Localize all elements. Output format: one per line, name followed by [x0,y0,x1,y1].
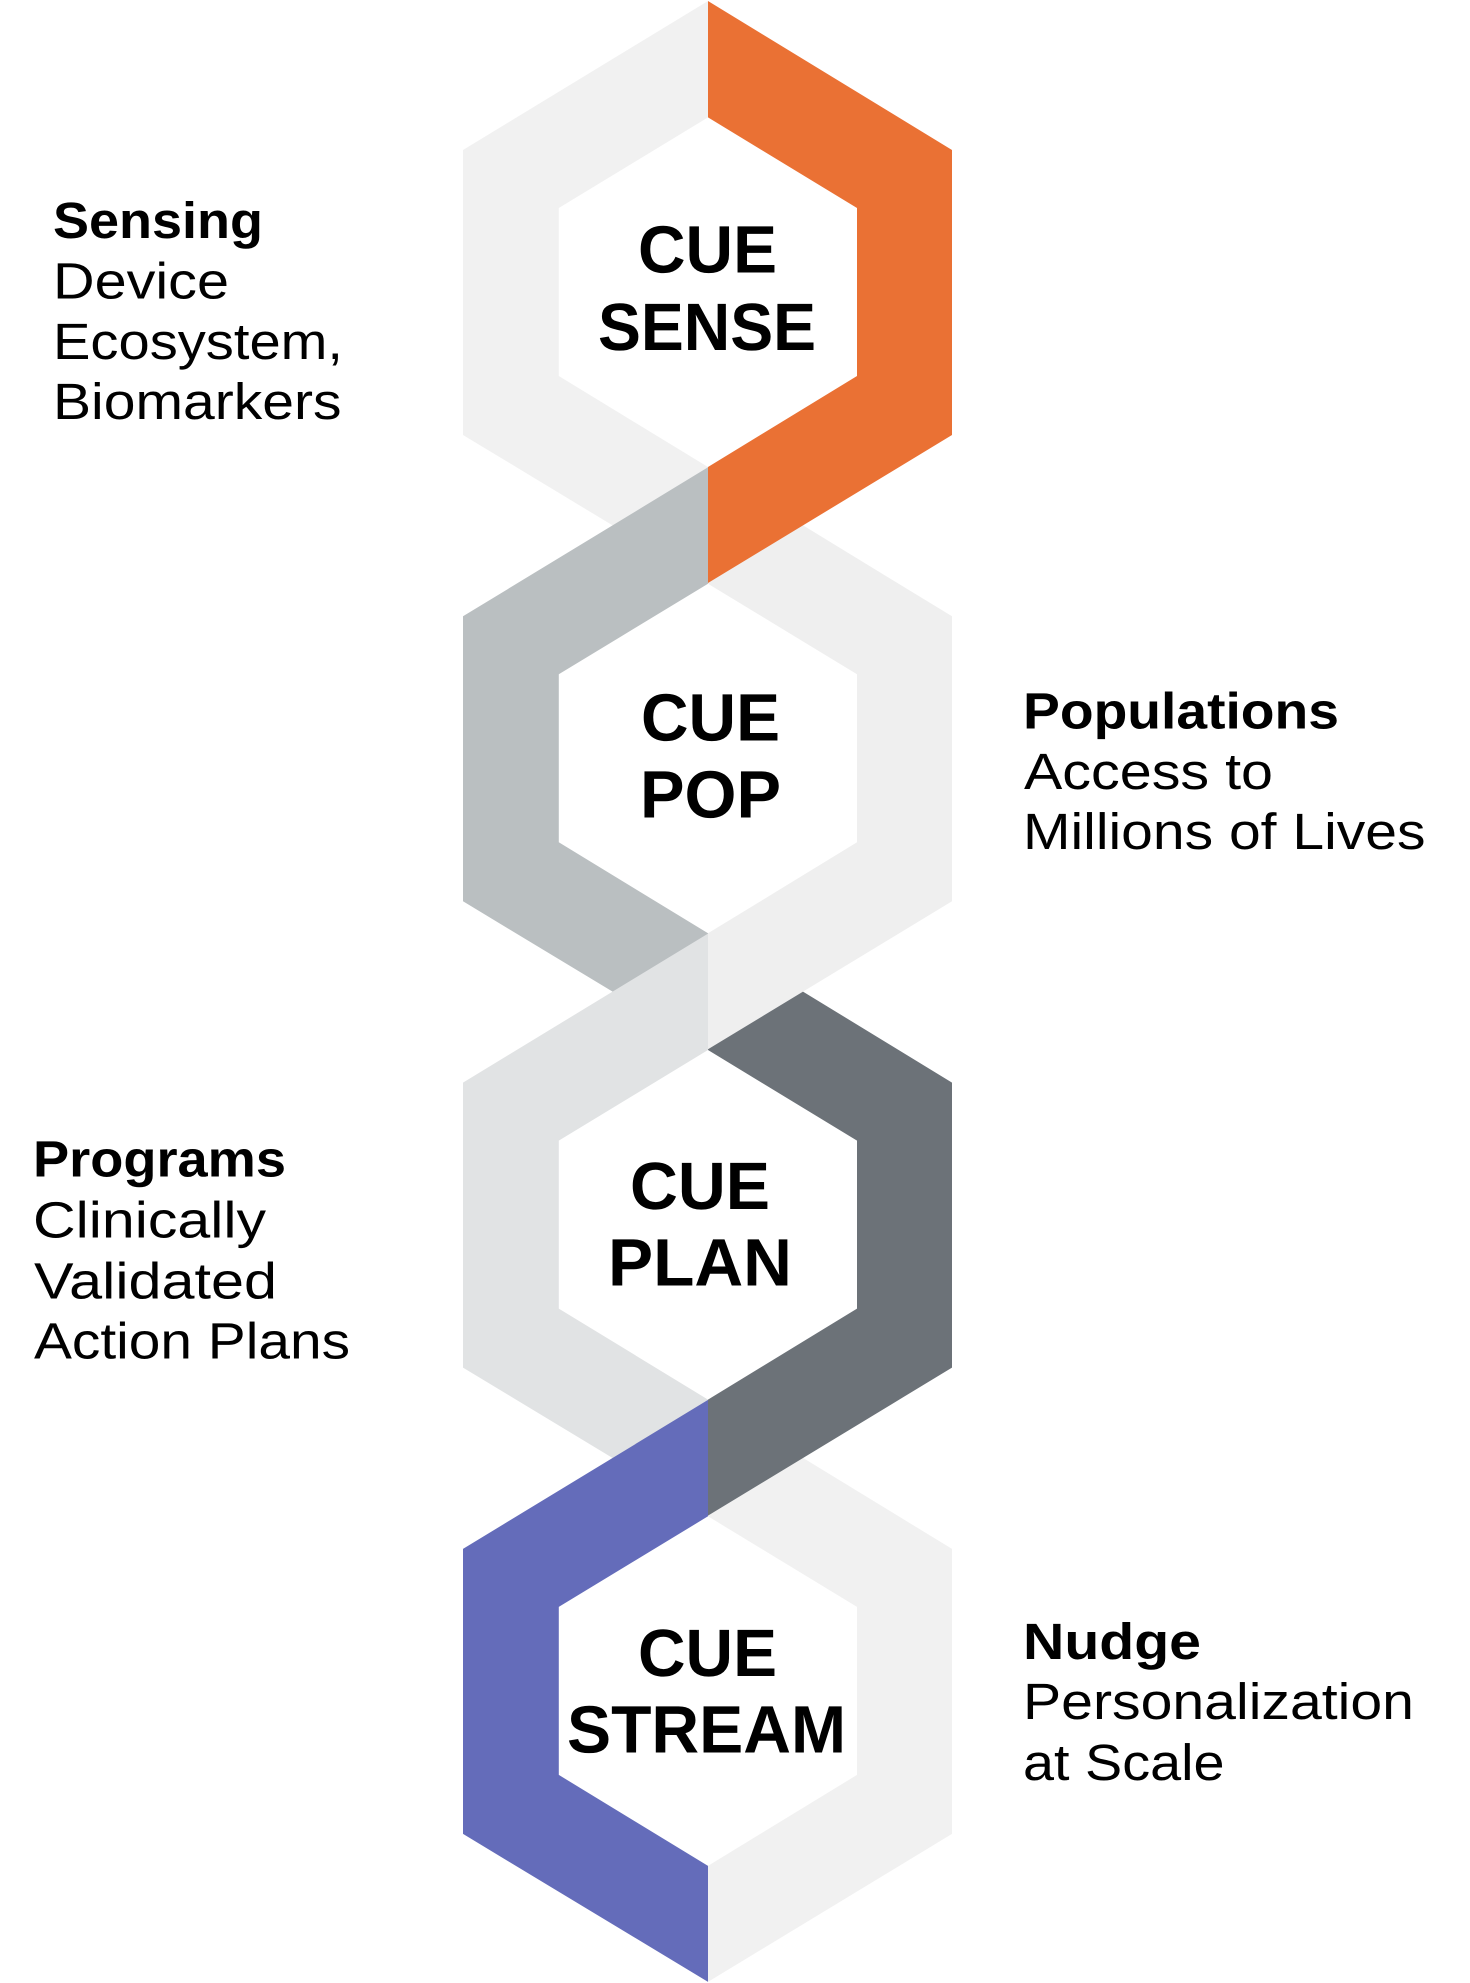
hexagon title: CUE PLAN: PLAN [608,1225,792,1300]
hexagon title: CUE PLAN: CUE [630,1149,770,1224]
text block: Sensing: Ecosystem, [53,313,343,370]
text block: Nudge: Nudge [1023,1613,1201,1670]
text block: Sensing: Biomarkers [53,373,342,430]
text block: Programs [33,1131,350,1370]
hexagon title: CUE PLAN [608,1149,792,1300]
text block: Populations: Millions of Lives [1023,803,1426,860]
hexagon title: CUE SENSE: CUE [638,213,777,288]
text block: Nudge: Personalization [1023,1673,1414,1730]
hexagon 4 left half: purple [463,1400,708,1982]
hexagon 4 right half: light gray [708,1400,952,1982]
text block: Sensing [53,192,343,430]
hexagon 1 left half: light gray [463,1,708,583]
hexagon 3 left half: pale gray [463,934,708,1516]
hexagon title: CUE POP: CUE [641,681,780,756]
hexagon title: CUE POP: POP [640,757,781,832]
hexagon 2 right half: light gray [708,467,952,1049]
hexagon 2 left half: medium gray [463,467,708,1049]
text block: Populations: Access to [1024,743,1273,800]
text block: Programs: Clinically [33,1192,267,1248]
hexagon title: CUE STREAM: CUE [638,1616,777,1691]
text block: Nudge: at Scale [1023,1734,1224,1791]
hexagon title: CUE SENSE: SENSE [598,290,816,365]
text block: Programs: Programs [33,1131,286,1188]
text block: Nudge [1023,1613,1414,1791]
hexagon 3 right half: dark slate [708,934,952,1516]
text block: Programs: Validated [34,1252,277,1310]
text block: Populations [1023,682,1426,860]
hexagon 1 right half: orange [708,1,952,583]
text block: Programs: Action Plans [34,1312,350,1370]
text block: Populations: Populations [1023,682,1339,739]
text block: Sensing: Sensing [53,192,263,249]
text block: Sensing: Device [53,252,229,310]
hexagon title: CUE STREAM: STREAM [567,1693,846,1768]
hexagon title: CUE STREAM [567,1616,846,1768]
hexagon title: CUE SENSE [598,213,816,365]
hexagon title: CUE POP [640,681,781,832]
